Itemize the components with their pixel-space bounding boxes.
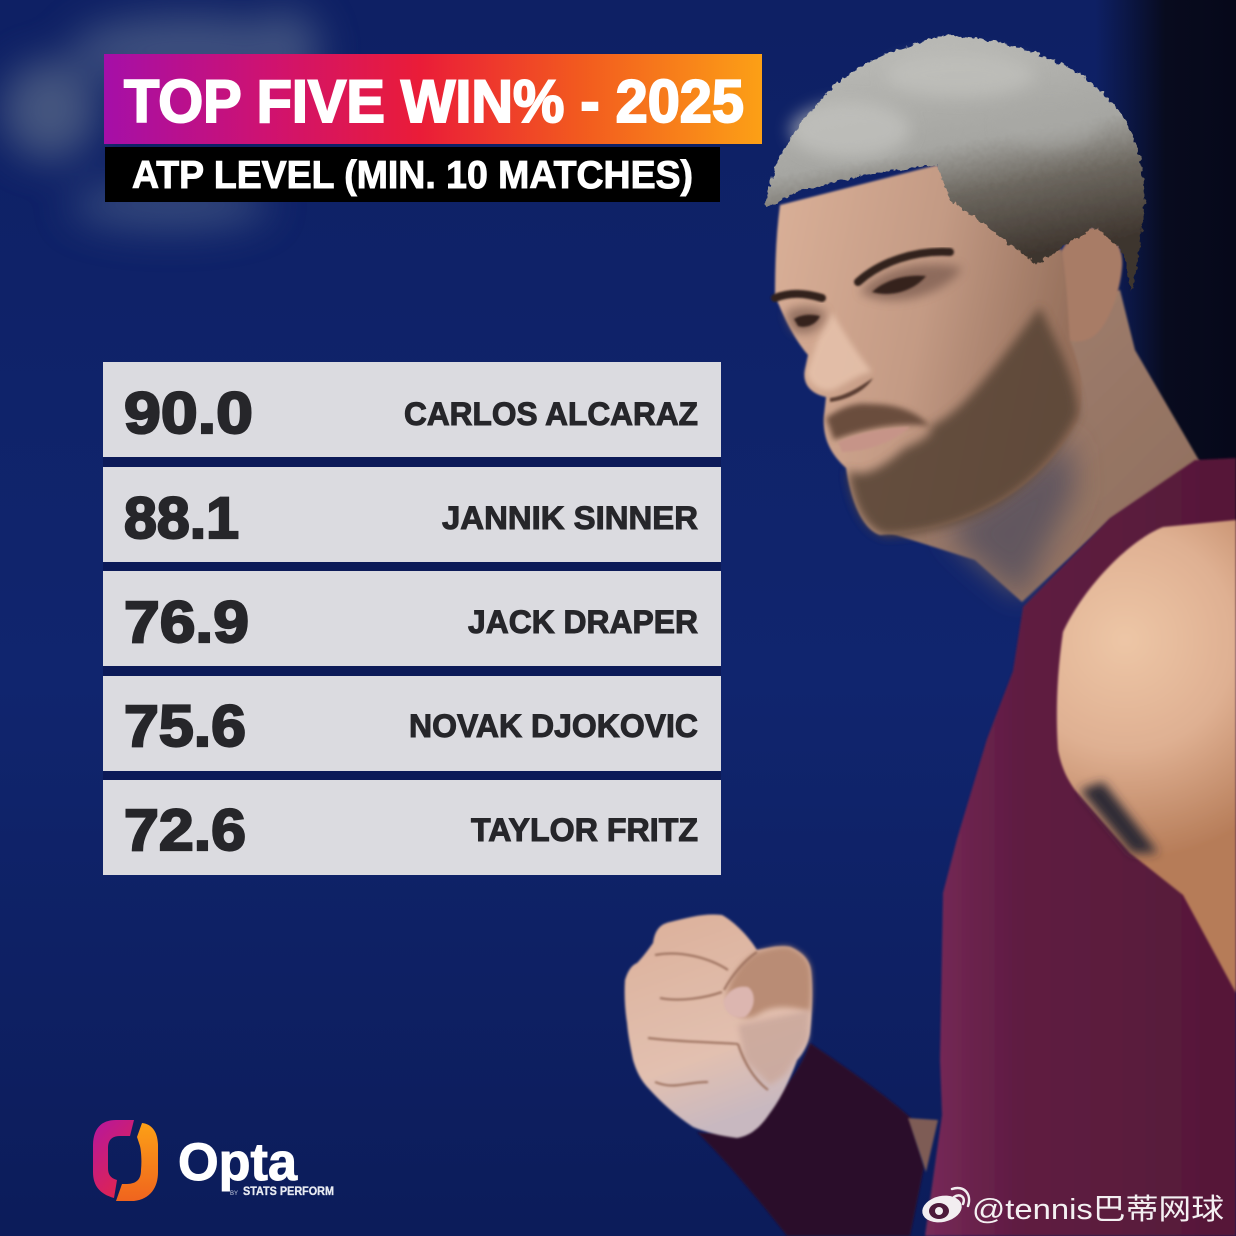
by Stats Perform: BY xyxy=(230,1191,238,1197)
player: nose highlight xyxy=(807,312,872,390)
player: thumbnail xyxy=(724,987,754,1018)
row 3: Jack Draper xyxy=(103,571,721,666)
player: ear xyxy=(1060,227,1122,341)
row 4: Novak Djokovic: 75.6 xyxy=(124,694,246,759)
row dividers backing xyxy=(103,362,721,875)
row 3: Jack Draper: 76.9 xyxy=(124,590,249,655)
player: hair xyxy=(765,36,1144,292)
row 1: Carlos Alcaraz: CARLOS ALCARAZ xyxy=(404,396,698,432)
player: beard xyxy=(848,307,1078,536)
player: eye sockets xyxy=(785,264,962,333)
background: blurred arena logo shapes xyxy=(2,10,320,229)
player: brows xyxy=(775,252,950,298)
player: neck xyxy=(880,290,1200,602)
subtitle text: ATP LEVEL (MIN. 10 MATCHES) xyxy=(132,154,693,197)
row 1: Carlos Alcaraz xyxy=(103,362,721,457)
player: thumb xyxy=(727,946,812,1018)
row 4: Novak Djokovic: NOVAK DJOKOVIC xyxy=(409,708,698,744)
row 3: Jack Draper: JACK DRAPER xyxy=(468,604,698,640)
icon: Opta logo mark xyxy=(93,1120,158,1201)
player: eyes xyxy=(794,276,926,327)
watermark: Weibo handle xyxy=(920,1188,1224,1226)
row 1: Carlos Alcaraz: 90.0 xyxy=(124,381,253,446)
row 2: Jannik Sinner: JANNIK SINNER xyxy=(442,500,698,536)
player: armpit shadow xyxy=(1080,782,1158,853)
row 5: Taylor Fritz xyxy=(103,780,721,875)
player: moustache xyxy=(826,404,930,440)
table: top five win percentages xyxy=(103,362,721,875)
player: face xyxy=(775,165,1082,535)
row 4: Novak Djokovic xyxy=(103,676,721,771)
player: wristband xyxy=(697,1043,924,1236)
row 5: Taylor Fritz: TAYLOR FRITZ xyxy=(471,812,698,848)
player: back of hand xyxy=(738,1010,810,1085)
player: bright hair patches xyxy=(790,53,1100,158)
player: fist xyxy=(625,914,812,1138)
icon: Weibo xyxy=(920,1188,969,1226)
player: right shoulder and arm xyxy=(1057,520,1236,993)
row 2: Jannik Sinner: 88.1 xyxy=(124,486,239,551)
watermark: Weibo handle: @tennis巴蒂网球 xyxy=(972,1193,1224,1226)
title text: TOP FIVE WIN% - 2025 xyxy=(124,68,744,135)
player: nostril shadow xyxy=(830,378,873,402)
row 2: Jannik Sinner xyxy=(103,467,721,562)
player: Carlos Alcaraz photo illustration xyxy=(625,36,1236,1236)
Opta wordmark: Opta xyxy=(178,1133,298,1192)
title banner xyxy=(104,54,762,144)
player: under-chin shadow xyxy=(945,440,1075,598)
player: shirt xyxy=(925,458,1236,1236)
subtitle banner xyxy=(105,147,720,202)
player: finger creases xyxy=(648,952,768,1090)
player: forearm skin xyxy=(908,1118,938,1172)
row 5: Taylor Fritz: 72.6 xyxy=(124,798,246,863)
Opta wordmark: STATS PERFORM xyxy=(243,1184,334,1198)
player: lips xyxy=(838,427,910,452)
